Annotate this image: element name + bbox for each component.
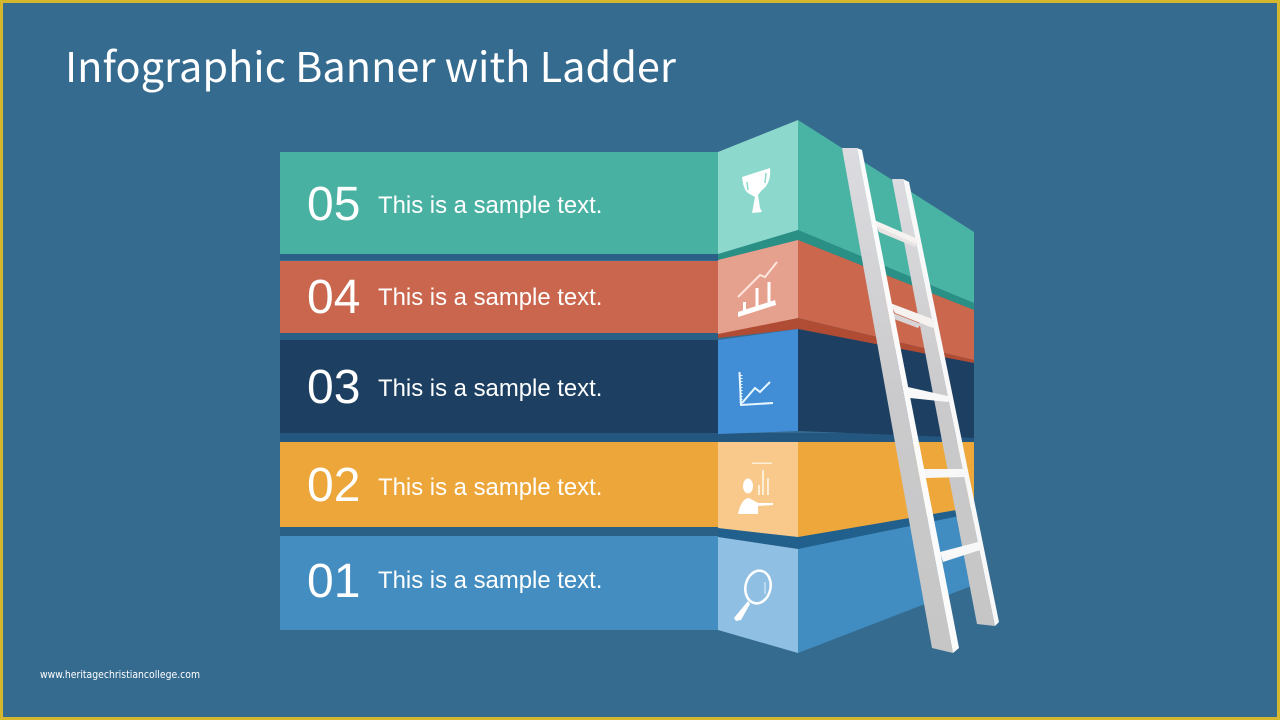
title: Infographic Banner with Ladder — [65, 34, 676, 94]
ladder rungs — [874, 220, 980, 562]
number 05: 05 — [307, 178, 360, 231]
band 02 — [280, 442, 974, 549]
number 03: 03 — [307, 361, 360, 414]
ladder — [842, 148, 999, 653]
website footer text: www.heritagechristiancollege.com — [40, 669, 200, 681]
icon: rising bars chart — [738, 262, 777, 317]
label 01: This is a sample text. — [378, 567, 602, 594]
icon: magnifier — [734, 568, 774, 621]
band 01 — [280, 513, 974, 653]
icon: trophy — [742, 168, 770, 213]
label 05: This is a sample text. — [378, 192, 602, 219]
number 02: 02 — [307, 459, 360, 512]
label 04: This is a sample text. — [378, 284, 602, 311]
band 05 — [280, 120, 974, 310]
icon: presenter — [738, 462, 773, 514]
label 02: This is a sample text. — [378, 474, 602, 501]
number 01: 01 — [307, 555, 360, 608]
ladder left rail — [842, 148, 959, 653]
icon: line chart — [740, 372, 773, 405]
band 03 — [280, 329, 974, 442]
band 04 — [280, 240, 974, 364]
label 03: This is a sample text. — [378, 375, 602, 402]
number 04: 04 — [307, 271, 360, 324]
ladder right rail — [892, 179, 999, 626]
